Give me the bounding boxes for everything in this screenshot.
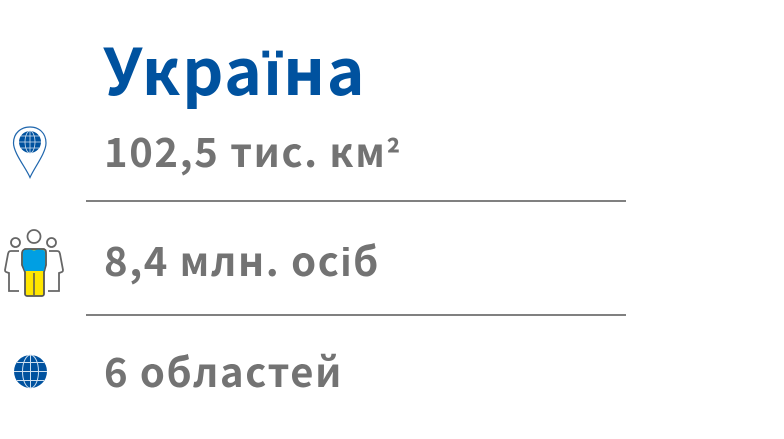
title: Україна — [103, 22, 366, 114]
text: area: 102,5 тис. км² — [104, 121, 400, 179]
text: regions: 6 областей — [104, 341, 343, 399]
text: population: 8,4 млн. осіб — [104, 230, 380, 288]
